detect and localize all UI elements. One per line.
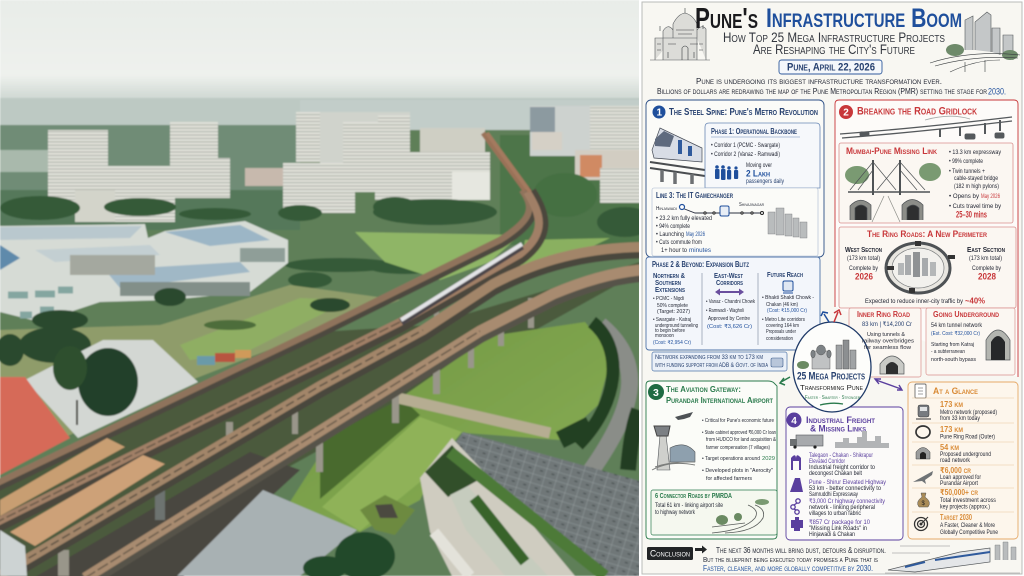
column: northern and southern extensions: 50% complete [657, 303, 688, 309]
text: west section: Complete by [849, 266, 878, 272]
icon: passengers [715, 165, 738, 180]
stat: total investment: key projects (approx.) [940, 504, 990, 510]
item: Pune-Shirur elevated highway: Samruddhi Expressway [809, 492, 858, 498]
subpanel: inner ring road box [849, 308, 921, 377]
icon: highway sketch [840, 116, 1012, 139]
column: future reach: Future Reach [767, 272, 803, 279]
conclusion text: Faster, cleaner, and more globally competitive by 2030. [703, 564, 873, 573]
icon: freight truck and skyline [790, 431, 889, 449]
heading: aviation gateway: The Aviation Gateway: [666, 384, 741, 394]
subpanel: going underground: Going Underground [933, 310, 1000, 319]
airport bullets: • State cabinet approved ₹6,000 Cr loan [702, 429, 776, 436]
item: highway connectivity network: villages to urban fabric [809, 511, 861, 517]
intro text: Pune is undergoing its biggest infrastructure transformation ever. [696, 77, 942, 86]
text: east section: (173 km total) [969, 256, 1002, 262]
stat: underground road 54 km: Proposed underground [940, 452, 991, 458]
text: east section: East Section [967, 247, 1005, 254]
item: Talegaon elevated corridor: Elevated Corridor [809, 459, 845, 465]
item: highway connectivity network [791, 498, 885, 517]
photo: tree belts [0, 173, 653, 288]
central hub: 25 mega projects: Faster · Smarter · Stronger [805, 395, 860, 401]
subpanel: line 3 the IT gamechanger: • Launching [656, 232, 684, 238]
item: Pune-Shirur elevated highway: 53 km - better connectivity to [809, 486, 882, 492]
subpanel: going underground: Starting from Katraj [931, 342, 974, 348]
item: highway connectivity network: network - linking peripheral [809, 505, 875, 511]
subpanel: connector roads by PMRDA: to highway network [655, 510, 696, 516]
photo: dark foreground trees [0, 288, 350, 366]
text: inner ring road details: Using tunnels & [867, 332, 905, 338]
photo: footbridge [398, 398, 550, 433]
subpanel: going underground: (Est. Cost: ₹32,000 Cr) [931, 330, 980, 337]
text: inner ring road details: 83 km | ₹14,200 Cr [862, 321, 912, 328]
column: east-west corridors: • Ramwadi - Wagholi [706, 308, 744, 314]
subpanel: mumbai-pune missing link: • 13.3 km expressway [949, 150, 1001, 156]
column: future reach: Proposals under [766, 329, 796, 335]
stat: airport loan: Loan approved for [940, 475, 981, 481]
stat: underground road 54 km: 54 km [940, 443, 959, 452]
stat: target 2030: Target 2030 [940, 513, 972, 522]
header [650, 3, 1020, 96]
photo: metro train [401, 244, 522, 322]
panel: phase 2 and beyond expansion blitz: Phase 2 & Beyond: Expansion Blitz [652, 260, 749, 269]
photo: bottom-left corner building [0, 530, 27, 576]
stat: total investment: Total investment across [940, 498, 996, 504]
heading: aviation gateway: Purandar International Airport [666, 395, 773, 405]
photo: grey ribbed roof [452, 432, 640, 576]
subpanel: connector roads by PMRDA [651, 490, 777, 535]
item: missing link roads package: "Missing Link Roads" in [809, 526, 867, 532]
photo: bottom tree [303, 532, 395, 576]
subpanel: mumbai-pune missing link: 25–30 mins [956, 210, 987, 220]
heading badge 1 [652, 106, 666, 118]
subpanel: mumbai-pune missing link: • Opens by [949, 194, 979, 200]
subpanel: phase 1 operational backbone [705, 123, 820, 188]
heading: road gridlock: Breaking the Road Gridlock [857, 106, 977, 118]
column: east-west corridors: Approved by Centre [708, 316, 750, 322]
airport bullets: for affected farmers [706, 476, 752, 482]
stat: underground road 54 km [916, 443, 991, 464]
subpanel: phase 1 operational backbone: • Corridor 2 (Vanaz - Ramwadi) [711, 152, 780, 158]
subpanel: connector roads by PMRDA: Total 61 km - linking airport site [655, 503, 724, 509]
date badge: Pune, April 22, 2026 [787, 62, 875, 74]
airport bullets: from HUDCO for land acquisition & [706, 437, 776, 443]
photo: distant haze and tree line [0, 98, 640, 245]
subpanel: mumbai-pune missing link: • 99% complete [949, 159, 984, 165]
subpanel: line 3 the IT gamechanger: • Cuts commute from [656, 240, 702, 246]
item: Pune-Shirur elevated highway: Pune - Shirur Elevated Highway [809, 480, 886, 486]
item: Talegaon elevated corridor [791, 453, 876, 477]
item: Talegaon elevated corridor: Industrial freight corridor to [809, 465, 876, 471]
stat: target 2030 [914, 513, 999, 536]
panel 4: industrial freight and missing links [786, 407, 903, 540]
icon: ring road around city [886, 241, 955, 293]
icon: cable-stayed bridge and twin tunnels [845, 160, 941, 222]
callout: network expansion strip: Network expanding from 33 km to 173 km [655, 354, 763, 361]
icon: bullet train sketch [885, 542, 1020, 573]
panel 2: breaking the road gridlock [835, 100, 1018, 377]
column: northern and southern extensions: monsoon [655, 333, 674, 339]
text: inner ring road details: for seamless flow [864, 345, 911, 351]
title [695, 3, 962, 35]
icon: clipboard [915, 384, 926, 398]
stat: ring road 173 km: 173 km [940, 425, 963, 434]
photo: central apartment blocks [283, 112, 490, 213]
subpanel: line 3 the IT gamechanger: minutes [689, 248, 711, 254]
airport bullets [702, 418, 776, 482]
stat: underground road 54 km: road network [940, 458, 971, 464]
conclusion text: But the blueprint being executed today promises a Pune that is [703, 557, 879, 564]
conclusion [647, 542, 1020, 573]
column: northern and southern extensions: Southern [655, 280, 681, 287]
photo: road with hedge [560, 322, 639, 472]
stat: total investment: $ [922, 501, 926, 507]
subpanel: phase 1 operational backbone: Phase 1: Operational Backbone [711, 127, 797, 136]
photo: white-grey warehouse roof [25, 340, 198, 438]
heading: at a glance: At a Glance [933, 386, 978, 396]
heading badge 1: 1 [656, 108, 662, 118]
item: missing link roads package: Hinjawadi & Chakan [809, 532, 855, 538]
subpanel: mumbai-pune missing link: Mumbai-Pune Missing Link [846, 146, 938, 156]
photo: big lawn [288, 322, 612, 532]
item: missing link roads package: ₹857 Cr package for 10 [809, 519, 871, 526]
column: northern and southern extensions: (Cost: ₹2,954 Cr) [653, 340, 691, 346]
infographic panel background [642, 2, 1022, 574]
photo: viaduct track deck 4 [85, 270, 640, 576]
panel 1: the steel spine metro revolution [646, 100, 824, 257]
photo: hazy sky [0, 0, 640, 100]
text: west section: (173 km total) [847, 256, 880, 262]
text: inner ring road details: Inner Ring Road [857, 310, 911, 319]
aerial photo: elevated metro viaducts across Pune [0, 0, 653, 576]
text: east section: 2028 [978, 272, 996, 282]
heading: industrial freight: Industrial Freight [806, 415, 875, 425]
photo: colourful tents [197, 350, 251, 365]
heading badge 2: 2 [843, 108, 849, 118]
title: Pune's [695, 3, 758, 35]
stat: metro network 173 km: 173 km [940, 400, 963, 409]
column: northern and southern extensions [653, 273, 698, 346]
stat: total investment: ₹50,000+ cr [940, 488, 979, 497]
icon: cathedral sketch [650, 8, 710, 60]
photo: viaduct track deck 2 [0, 133, 542, 527]
subpanel: phase 1 operational backbone: • Corridor 1 (PCMC - Swargate) [711, 143, 780, 149]
icon: tunnel entrance [986, 330, 1010, 360]
stat: airport loan [913, 466, 981, 487]
photo: sunlit lawn patch [322, 417, 462, 531]
text: east section [967, 247, 1005, 282]
stat: total investment [918, 488, 996, 510]
photo: right apartment blocks [530, 106, 640, 203]
subpanel: line 3 the IT gamechanger [652, 188, 818, 256]
column: northern and southern extensions: Extensions [655, 287, 686, 294]
item: Talegaon elevated corridor: Talegaon - Chakan - Shikrapur [809, 453, 873, 459]
column: future reach: Chakan (46 km) [766, 302, 798, 308]
photo: grey glazed roof [177, 490, 357, 576]
column: east-west corridors: East-West [714, 273, 743, 280]
airport bullets: • Developed plots in "Aerocity" [702, 468, 773, 474]
subpanel: mumbai-pune missing link: May 2026 [981, 194, 1000, 200]
stat: airport loan: Purandar Airport [940, 481, 978, 487]
subpanel: ring roads: Expected to reduce inner-city traffic by [865, 299, 963, 305]
column: east-west corridors [706, 273, 755, 330]
arrow: hub to road panel [834, 310, 841, 322]
conclusion text [703, 546, 886, 573]
stat: ring road 173 km [916, 425, 995, 440]
stat: target 2030: A Faster, Cleaner & More [940, 523, 996, 529]
photo: viaduct columns [58, 298, 534, 576]
photo: large tree [53, 346, 138, 425]
stat: metro network 173 km [916, 400, 997, 422]
arrow: hub to at-a-glance panel [875, 379, 902, 390]
panel 3: the aviation gateway [646, 381, 777, 539]
route diagram: Hinjawadi [656, 206, 677, 212]
text: east section: Complete by [972, 266, 1001, 272]
intro text [657, 77, 1006, 96]
photo: viaduct track deck 1 [0, 133, 532, 487]
subpanel: going underground [926, 308, 1015, 375]
icon: metro train on viaduct [650, 128, 705, 184]
arrow: hub to aviation panel [780, 377, 790, 385]
photo: low-rise campus buildings [0, 221, 288, 322]
photo: shaded ground under viaducts [0, 262, 640, 576]
subpanel: mumbai-pune missing link: • Twin tunnels + [949, 169, 985, 175]
arrow: conclusion pointer [695, 546, 707, 554]
column: east-west corridors: (Cost: ₹3,626 Cr) [707, 323, 752, 330]
heading badge 3: 3 [653, 387, 659, 399]
route diagram [656, 202, 764, 216]
subtitle: Are Reshaping the City's Future [753, 41, 915, 57]
subpanel: line 3 the IT gamechanger: 1+ hour to [661, 248, 688, 254]
column: northern and southern extensions: Northern & [653, 273, 685, 280]
icon: skyline and flyover sketch [930, 12, 1020, 72]
subpanel: mumbai-pune missing link: (182 m high pylons) [954, 184, 999, 190]
icon: cathedral and skyline in hub [797, 340, 856, 369]
column: northern and southern extensions: • PCMC - Nigdi [653, 296, 684, 302]
subpanel: connector roads by PMRDA: 6 Connector Roads by PMRDA [655, 493, 732, 500]
airport bullets: • Target operations around [702, 456, 760, 462]
subpanel: going underground: north-south bypass [931, 357, 976, 363]
stat: metro network 173 km: from 33 km today [940, 416, 980, 422]
subpanel: mumbai-pune missing link: cable-stayed bridge [954, 176, 999, 182]
subpanel: ring roads [839, 227, 1016, 308]
photo: salmon roof [0, 377, 70, 475]
callout: network expansion strip: with funding support from ADB & Govt. of India [655, 362, 769, 369]
subpanel: mumbai-pune missing link: • Cuts travel time by [949, 204, 1001, 210]
photo: orange station roofs [0, 438, 165, 546]
arrow: hub to metro panel [821, 312, 829, 322]
item: Talegaon elevated corridor: decongest Chakan belt [809, 471, 862, 477]
panel: phase 2 and beyond expansion blitz [646, 257, 820, 350]
subpanel: phase 1 operational backbone: Moving over [746, 163, 772, 169]
airport bullets: 2029 [762, 456, 775, 462]
icon: winding road sketch [712, 499, 769, 533]
subpanel: phase 1 operational backbone: passengers daily [746, 179, 784, 185]
photo: roof-garden building [360, 438, 605, 576]
subpanel: line 3 the IT gamechanger: • 23.2 km fully elevated [656, 216, 712, 222]
central hub: 25 mega projects: Transforming Pune [800, 383, 864, 392]
column: northern and southern extensions: underground tunneling [655, 323, 698, 329]
column: northern and southern extensions: • Swargate - Katraj [653, 317, 691, 323]
airport bullets: farmer compensation (7 villages) [706, 445, 770, 451]
text: inner ring road details: railway overbridges [862, 338, 914, 344]
photo: lawn shadow under viaduct [320, 398, 420, 499]
stat: target 2030: Globally Competitive Pune [940, 530, 999, 536]
intro text: 2030. [988, 86, 1006, 96]
icon: city sketch [768, 208, 807, 238]
stat: metro network 173 km: Metro network (proposed) [940, 410, 997, 416]
route diagram: Shivajinagar [739, 202, 764, 208]
conclusion label: Conclusion [650, 548, 690, 558]
column: future reach: • Metro Lite corridors [762, 317, 805, 323]
subpanel: ring roads: ~40% [965, 296, 985, 306]
photo: viaduct track deck 3 [0, 247, 640, 576]
column: future reach: • Bhakti Shakti Chowk - [762, 295, 814, 301]
column: future reach [762, 272, 814, 342]
column: east-west corridors: • Vanaz - Chandni Chowk [706, 299, 755, 305]
subpanel: mumbai-pune missing link [839, 143, 1013, 223]
heading: industrial freight: & Missing Links [810, 424, 866, 434]
callout: network expansion strip [652, 352, 787, 371]
heading badge 3 [648, 384, 664, 400]
icon: control tower, terminal and plane [652, 412, 695, 470]
title: Infrastructure Boom [766, 3, 962, 33]
subpanel: ring roads: The Ring Roads: A New Perimeter [867, 229, 988, 239]
airport bullets: • Critical for Pune's economic future [702, 418, 774, 424]
photo: left residential towers [48, 112, 320, 222]
heading: aviation gateway [666, 384, 773, 405]
central hub: 25 mega projects: 25 Mega Projects [797, 370, 866, 382]
conclusion text: The next 36 months will bring dust, detours & disruption. [716, 546, 886, 555]
panel: at a glance [908, 382, 1018, 539]
column: northern and southern extensions: (Target: 2027) [657, 309, 690, 315]
subtitle: How Top 25 Mega Infrastructure Projects [723, 29, 945, 45]
icon: tunnel [880, 356, 904, 374]
heading: industrial freight [806, 415, 875, 434]
column: northern and southern extensions: to begin before [655, 328, 685, 334]
heading badge 4: 4 [791, 416, 797, 427]
subtitle [723, 29, 945, 57]
column: future reach: covering 164 km [766, 323, 799, 329]
heading badge 2 [839, 105, 853, 119]
column: east-west corridors: Corridors [716, 280, 744, 287]
item: highway connectivity network: ₹3,000 Cr highway connectivity [809, 498, 885, 505]
heading: metro revolution: The Steel Spine: Pune's Metro Revolution [669, 107, 818, 118]
subpanel: going underground: - a subterranean [931, 349, 965, 355]
column: future reach: (Cost: ₹15,000 Cr) [767, 308, 807, 314]
subpanel: going underground: 54 km tunnel network [931, 323, 983, 329]
subpanel: phase 1 operational backbone: 2 Lakh [746, 168, 770, 178]
item: missing link roads package [791, 517, 871, 538]
stat: ring road 173 km: Pune Ring Road (Outer) [940, 434, 995, 440]
text: west section: 2026 [855, 272, 873, 282]
text: west section: West Section [845, 247, 882, 254]
photo: upper lawn [355, 232, 520, 280]
subpanel: line 3 the IT gamechanger: • 94% complete [656, 224, 691, 230]
text: west section [845, 247, 882, 282]
subpanel: line 3 the IT gamechanger: May 2026 [686, 232, 705, 238]
item: Pune-Shirur elevated highway [790, 478, 886, 498]
photo: lower left lawn and grounds [0, 284, 400, 436]
stat: airport loan: ₹6,000 cr [940, 466, 972, 475]
subpanel: line 3 the IT gamechanger: Line 3: The IT Gamechanger [656, 191, 733, 200]
column: future reach: consideration [766, 336, 793, 342]
central hub: 25 mega projects [793, 322, 871, 412]
text: inner ring road details [857, 310, 914, 351]
